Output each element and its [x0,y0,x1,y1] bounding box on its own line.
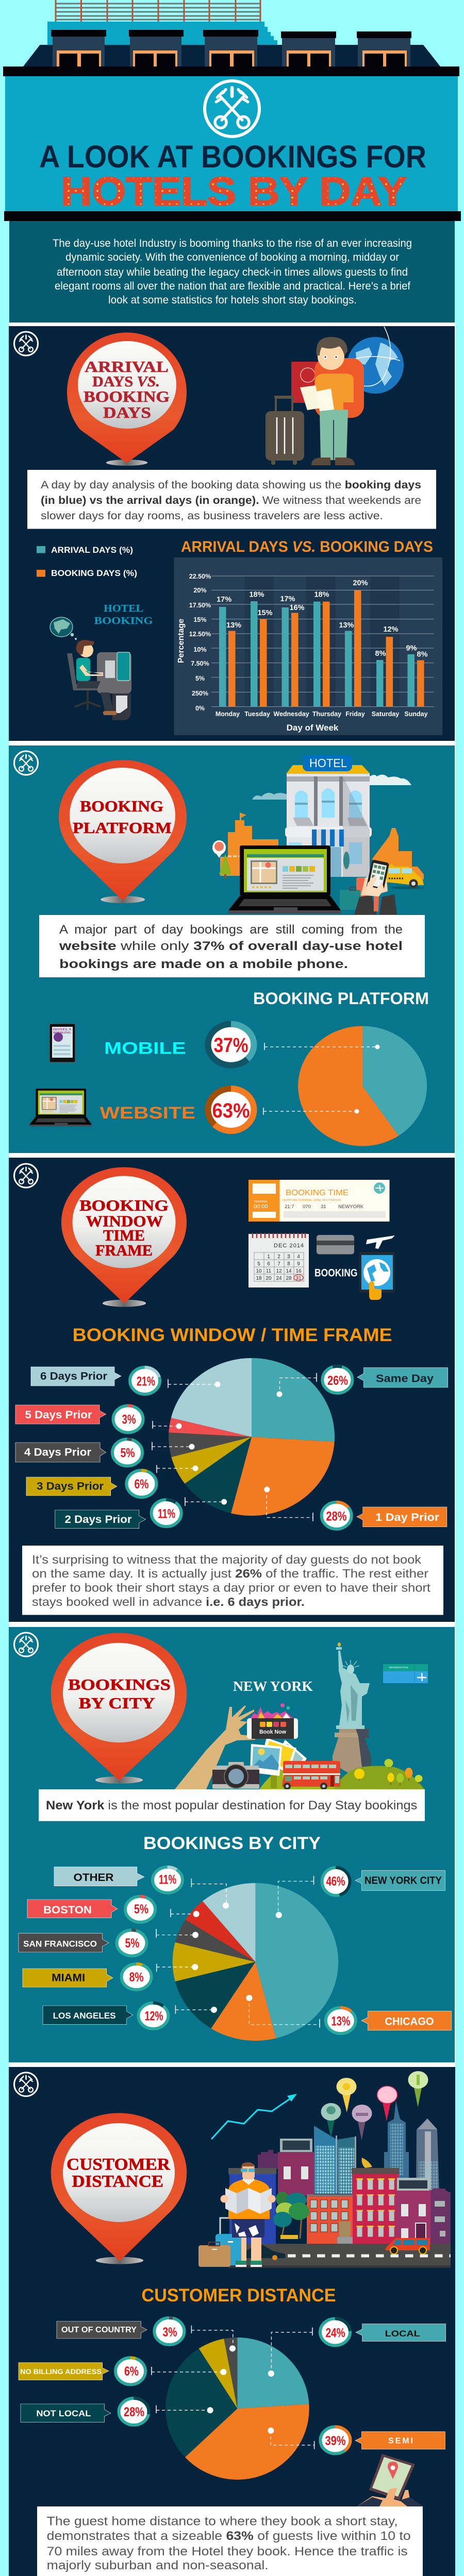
callout: other [54,1867,229,1908]
callout: miami [23,1964,198,1990]
map pin heading: BOOKING [84,387,170,405]
icon: phone: BOOKING [53,1031,71,1035]
callout: out of country: OUT OF COUNTRY [61,2326,137,2334]
callout: boston [27,1896,200,1922]
callout: new york city [276,1868,445,1918]
illustration: new york: NEW YORK [233,1679,313,1694]
chart heading: BOOKING PLATFORM [253,989,429,1008]
row: website: WEBSITE [100,1104,195,1122]
x axis labels: Tuesday [244,710,270,718]
description box [37,2506,423,2576]
callout: boston: BOSTON [43,1904,92,1916]
illustration: calendar: 9 [297,1261,300,1267]
bar chart: arrival vs booking days [174,557,442,735]
logo badge [14,2073,38,2096]
illustration: calendar: 8 [287,1261,290,1267]
mansard roof [23,45,440,66]
description box [22,1546,443,1615]
map pin heading: BOOKING [79,1196,169,1214]
callout: 3 days prior: 3 Days Prior [37,1481,104,1492]
description box [27,470,436,529]
callout: new york city: 46% [326,1874,345,1889]
description box: stays booked well in advance i.e. 6 days prior. [32,1595,305,1608]
y axis labels: 10% [193,646,207,653]
description box: The guest home distance to where they book a short stay, [47,2514,398,2529]
location pin and tree [212,840,239,878]
x axis labels: Saturday [372,710,399,718]
description box: A major part of day bookings are still coming from the [59,923,403,937]
panel: bookings by city [9,1627,455,2062]
callout: 6 days prior: 21% [137,1375,155,1389]
illustration: tourist in the city [198,2071,451,2268]
pie chart [298,1026,427,1146]
callout: new york city: NEW YORK CITY [364,1875,442,1887]
illustration: calendar: 5 [257,1261,260,1267]
map pin heading [59,760,187,903]
map pin heading: PLATFORM [73,819,172,837]
callout: miami: 8% [129,1970,144,1985]
callout: los angeles [43,2003,217,2029]
value labels: 18% [249,590,264,599]
callout: boston: 5% [134,1902,148,1917]
illustration: calendar: 31 [295,1276,302,1281]
illustration: map tablet [357,2454,423,2506]
axis title: percentage: Percentage [177,619,186,663]
map pin heading [51,2113,187,2264]
callout: 2 days prior [55,1497,227,1529]
hand holding phone: Book Now [259,1729,286,1735]
callout: 1 day prior: 28% [326,1510,346,1524]
double-decker bus [282,1761,340,1790]
description box: demonstrates that a sizeable 63% of guests live within 10 to [47,2529,411,2543]
illustration: calendar: 12 [276,1268,282,1274]
value labels: 8% [375,650,386,658]
callout: 5 days prior [15,1405,181,1432]
chart heading: CUSTOMER DISTANCE [141,2285,336,2306]
callout: san francisco [19,1929,198,1956]
callout: 5 days prior: 5 Days Prior [25,1409,92,1421]
intro text [53,238,412,306]
callout: local [268,2318,445,2377]
map pin heading: DAYS [103,403,151,421]
illustration: ticket: DEPATURE TERMINAL ZONE DESTINATION [283,1199,341,1202]
intro text: The day-use hotel Industry is booming thanks to the rise of an ever increasing [53,238,412,249]
illustration: ticket: 00:00 [254,1204,268,1210]
value labels: 17% [217,596,231,604]
map pin heading: DISTANCE [72,2173,163,2191]
callout: no billing address [19,2358,226,2384]
map pin heading: DAYS VS. [92,374,160,390]
callout: not local: 28% [124,2405,144,2419]
callout: chicago: CHICAGO [385,2016,434,2028]
callout: no billing address: 6% [124,2364,139,2379]
description box: majorly suburban and non-seasonal. [47,2558,269,2572]
clouds [252,793,287,800]
logo badge [14,1633,38,1656]
laptop [228,845,341,913]
description box: prefer to book their short stays a day prior or even to have their short [32,1581,431,1595]
map pin heading: WINDOW [86,1212,163,1230]
callout: no billing address: NO BILLING ADDRESS [20,2367,102,2376]
hotel roof illustration [23,0,440,66]
percent ring: 63% [212,1099,250,1122]
percent ring [208,1089,254,1131]
callout: los angeles: LOS ANGELES [53,2011,116,2021]
logo badge [14,751,38,775]
illustration: ticket: BOOKING TIME [286,1189,349,1197]
callout: semi: SEMI [388,2437,413,2446]
x axis labels: Friday [345,710,365,718]
value labels: 12% [383,625,399,634]
description box: 70 miles away from the Hotel they book. Hence the traffic is [47,2545,408,2558]
location pins [321,2071,428,2140]
callout: local: 24% [326,2326,345,2341]
callout: san francisco: SAN FRANCISCO [23,1939,97,1949]
value labels: 17% [280,595,295,603]
description box: on the same day. It is actually just 26% of the traffic. The rest either [32,1567,428,1580]
y axis labels: 22.50% [189,573,211,580]
illustration: ticket: 21:7 [285,1204,294,1210]
value labels: 9% [406,644,417,652]
icon: phone [49,1024,75,1062]
value labels: 16% [289,604,305,612]
illustration: card, tablet and plane [314,1235,395,1300]
hotel building [285,755,372,877]
description box: slower days for day rooms, as business travelers are less active. [41,510,383,522]
x axis labels: Monday [216,710,240,718]
title banner [3,66,461,221]
x axis labels: Thursday [312,710,341,718]
icon: phone: HOTEL 9 [53,1028,71,1031]
intro panel [9,221,455,323]
luggage [198,2218,241,2267]
value labels: 13% [226,621,241,630]
callout: san francisco: 5% [125,1936,139,1951]
value labels: 13% [339,621,354,630]
illustration: hotel booking desk [50,603,153,720]
row: mobile: MOBILE [104,1039,186,1057]
y axis labels: 20% [193,587,207,594]
illustration: calendar: 6 [267,1261,270,1267]
panel: booking platform [9,745,455,1153]
callout: not local: NOT LOCAL [36,2409,91,2418]
percent ring: 37% [213,1034,248,1057]
description box: A day by day analysis of the booking data showing us the booking days [41,479,421,491]
pie chart [169,1358,335,1516]
y axis labels: 7.50% [191,660,209,667]
boarding pass [383,1664,428,1683]
callout: 2 days prior: 11% [158,1507,175,1521]
panel: arrival vs booking days [9,326,455,741]
orange skyline [220,812,424,879]
callout: other: OTHER [73,1872,113,1884]
callout: 4 days prior: 4 Days Prior [24,1447,91,1458]
callout: out of country [57,2318,236,2351]
map pin heading: ARRIVAL [85,358,169,376]
intro text: elegant rooms all over the nation that are flexible and practical. Here’s a brief [55,280,410,292]
map pin heading [67,332,187,466]
illustration: calendar: 24 [276,1276,282,1281]
callout: not local [21,2398,213,2425]
illustration: calendar: DEC 2014 [274,1243,304,1249]
logo badge [14,1164,38,1188]
illustration: calendar: 2 [277,1254,280,1260]
illustration: ticket [248,1180,390,1222]
illustration: calendar: 11 [266,1268,272,1274]
illustration: calendar: 18 [256,1276,262,1281]
map pin heading: BOOKINGS [68,1675,171,1693]
illustration: calendar: 16 [295,1268,302,1274]
callout: same day [276,1366,448,1397]
illustration: traveller with suitcase and globe [266,327,404,465]
callout: 6 days prior [31,1367,221,1394]
growth arrow [211,2094,297,2139]
logo: crossed keys [205,81,259,137]
hotel sign [303,755,352,771]
y axis labels: 15% [193,616,207,623]
logo badge [14,332,38,355]
dormer windows [51,30,411,66]
illustration: ticket: NEWYORK [338,1204,364,1210]
value labels [217,579,428,658]
description box: website while only 37% of overall day-use hotel [59,939,403,953]
roof railing [55,0,260,22]
row: mobile [49,1024,379,1065]
street buildings [228,2139,451,2245]
value labels: 18% [314,590,329,599]
illustration: calendar [248,1233,309,1287]
x axis labels: Wednesday [273,710,309,718]
hand holding phone [175,1703,298,1789]
camera [212,1762,259,1789]
illustration: calendar: 7 [277,1261,280,1267]
callout: 2 days prior: 2 Days Prior [65,1514,132,1526]
leader line [263,1108,359,1115]
map pin heading: BOOKING [80,797,163,815]
row: website [29,1089,359,1131]
pie chart [173,1883,338,2041]
chart legend: ARRIVAL DAYS (%) [51,545,133,555]
callout: chicago [246,1995,451,2033]
callout: local: LOCAL [385,2329,420,2338]
illustration: new york [175,1642,428,1790]
leader line [264,1043,379,1050]
illustration: calendar: 28 [286,1276,292,1281]
trees [273,2192,309,2239]
x axis labels [216,710,428,718]
axis title: day of week: Day of Week [287,723,339,733]
towers [384,2100,439,2195]
chart heading: BOOKINGS BY CITY [143,1834,321,1853]
hands holding phone [354,859,397,914]
callout: out of country: 3% [163,2325,177,2340]
illustration: ticket: 31 [321,1204,326,1210]
value labels: 20% [353,579,368,587]
heading line 2: HOTELS BY DAY [61,168,407,214]
intro text: afternoon stay while beating the legacy check-in times allows guests to find [57,266,408,278]
y axis labels [189,573,211,712]
booking bars [228,590,424,707]
callout: 4 days prior [15,1439,195,1466]
chart heading: ARRIVAL DAYS VS. BOOKING DAYS [181,538,433,555]
illustration: card, tablet and plane: BOOKING [314,1267,358,1279]
callout: 5 days prior: 3% [122,1413,136,1427]
suitcases [340,877,368,910]
description box: (in blue) vs the arrival days (in orange). We witness that weekends are [41,495,421,506]
callout: miami: MIAMI [52,1972,85,1984]
callout: 1 day prior [264,1487,447,1529]
illustration: hotel booking desk: BOOKING [94,615,153,626]
illustration: hotel booking desk: HOTEL [104,603,143,614]
photos [250,1738,307,1776]
callout: 3 days prior: 6% [134,1477,148,1492]
illustration: calendar: 20 [266,1276,272,1281]
intro text: look at some statistics for hotels short stay bookings. [108,294,357,306]
map pin heading: TIME [103,1226,145,1244]
hotel sign: HOTEL [309,756,347,770]
glass tower [314,2126,356,2194]
percent ring [208,1024,254,1065]
arrival bars [219,601,415,707]
y axis labels: 12.50% [189,631,211,638]
illustration: ticket: TERMINAL [254,1200,268,1204]
description box: It’s surprising to witness that the majority of day guests do not book [32,1553,422,1566]
callout: semi: 39% [325,2434,345,2448]
callout: other: 11% [159,1873,176,1887]
road [228,2238,451,2268]
statue of liberty [333,1642,371,1773]
description box [39,1789,425,1821]
y axis labels: 17.50% [189,602,211,609]
illustration: calendar: 10 [256,1268,262,1274]
illustration: calendar: 4 [297,1254,300,1260]
description box: New York is the most popular destination for Day Stay bookings [46,1799,417,1812]
value labels: 15% [257,609,273,617]
hills and trees [259,1759,424,1789]
heading line 1: A LOOK AT BOOKINGS FOR [39,139,426,174]
callout: 6 days prior: 6 Days Prior [40,1370,107,1382]
boarding pass: BOARDING PASS [389,1666,408,1669]
callout: 4 days prior: 5% [121,1446,135,1460]
callout: semi [268,2427,445,2453]
icon: laptop [29,1089,92,1126]
chart legend [37,545,137,578]
map pin heading [61,1167,187,1307]
map pin heading: CUSTOMER [67,2156,171,2174]
map pin heading: FRAME [95,1241,153,1259]
description box [39,915,425,977]
map pin heading: BY CITY [79,1694,155,1712]
chart heading: BOOKING WINDOW / TIME FRAME [73,1325,392,1345]
pie chart [165,2337,309,2480]
illustration: calendar: 3 [287,1254,290,1260]
callout: 3 days prior [26,1465,198,1497]
value labels: 8% [417,650,428,658]
chart legend: BOOKING DAYS (%) [51,568,137,578]
taxi [386,865,424,889]
y axis labels: 0% [195,705,205,712]
upper facade [47,22,277,45]
callout: chicago: 13% [331,2014,351,2029]
callout: 1 day prior: 1 Day Prior [375,1512,439,1523]
map pin heading [51,1633,187,1784]
callout: same day: 26% [327,1374,348,1388]
illustration: calendar: 14 [286,1268,292,1274]
x axis labels: Sunday [404,710,428,718]
illustration: ticket: 070 [303,1204,311,1210]
panel: customer distance [9,2067,455,2576]
callout: los angeles: 12% [144,2009,163,2023]
description box: bookings are made on a mobile phone. [59,957,348,971]
intro text: dynamic society. With the convenience of booking a morning, midday or [65,251,399,263]
callout: same day: Same Day [376,1372,434,1384]
panel: booking window [9,1158,455,1622]
illustration: calendar: 1 [267,1254,270,1260]
y axis labels: 250% [192,690,208,697]
illustration: hotel, city, laptop and phone [212,755,424,914]
tourist [221,2162,275,2267]
y axis labels: 5% [195,675,205,682]
